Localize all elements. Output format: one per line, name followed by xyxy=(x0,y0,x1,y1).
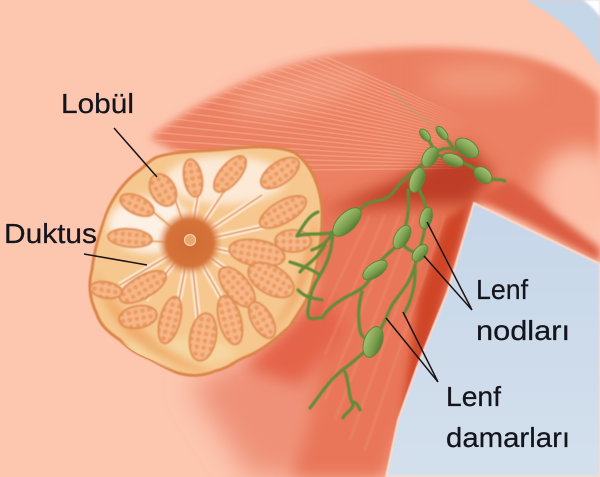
muscle shading xyxy=(227,53,600,440)
soft muscle halo below breast xyxy=(190,195,470,477)
upper muscle base xyxy=(150,48,600,260)
label: Lenf nodları: nodları xyxy=(476,315,570,346)
breast tissue shape xyxy=(90,147,322,375)
panel: blue background lower right xyxy=(386,203,600,477)
leader line: Duktus xyxy=(84,254,147,265)
lobules xyxy=(89,151,311,363)
nipple xyxy=(157,210,223,276)
pale fatty tissue xyxy=(96,156,316,372)
label: Lenf nodları: Lenf xyxy=(476,274,528,305)
leader lines: Lenf damarları xyxy=(386,312,438,382)
label: Lenf damarları: damarları xyxy=(446,422,570,453)
ducts xyxy=(120,190,270,335)
muscle fibres xyxy=(154,57,457,171)
leader lines: Lenf nodları xyxy=(424,222,472,310)
leader line: Lobül xyxy=(114,128,157,177)
label: Lenf damarları: Lenf xyxy=(446,381,501,412)
label: Lenf nodları xyxy=(476,274,570,346)
panel: lower muscle fibres xyxy=(320,215,445,450)
breast cross-section xyxy=(89,147,322,375)
lymph nodes xyxy=(328,124,495,360)
label: Duktus: Duktus xyxy=(4,218,97,249)
lymph vessels xyxy=(290,90,505,418)
label: Lobül: Lobül xyxy=(61,88,134,119)
label: Lenf damarları xyxy=(446,381,570,453)
panel: chest muscle xyxy=(150,0,600,477)
lower muscle base xyxy=(290,185,474,477)
panel: top-right blue background corner xyxy=(525,0,600,68)
